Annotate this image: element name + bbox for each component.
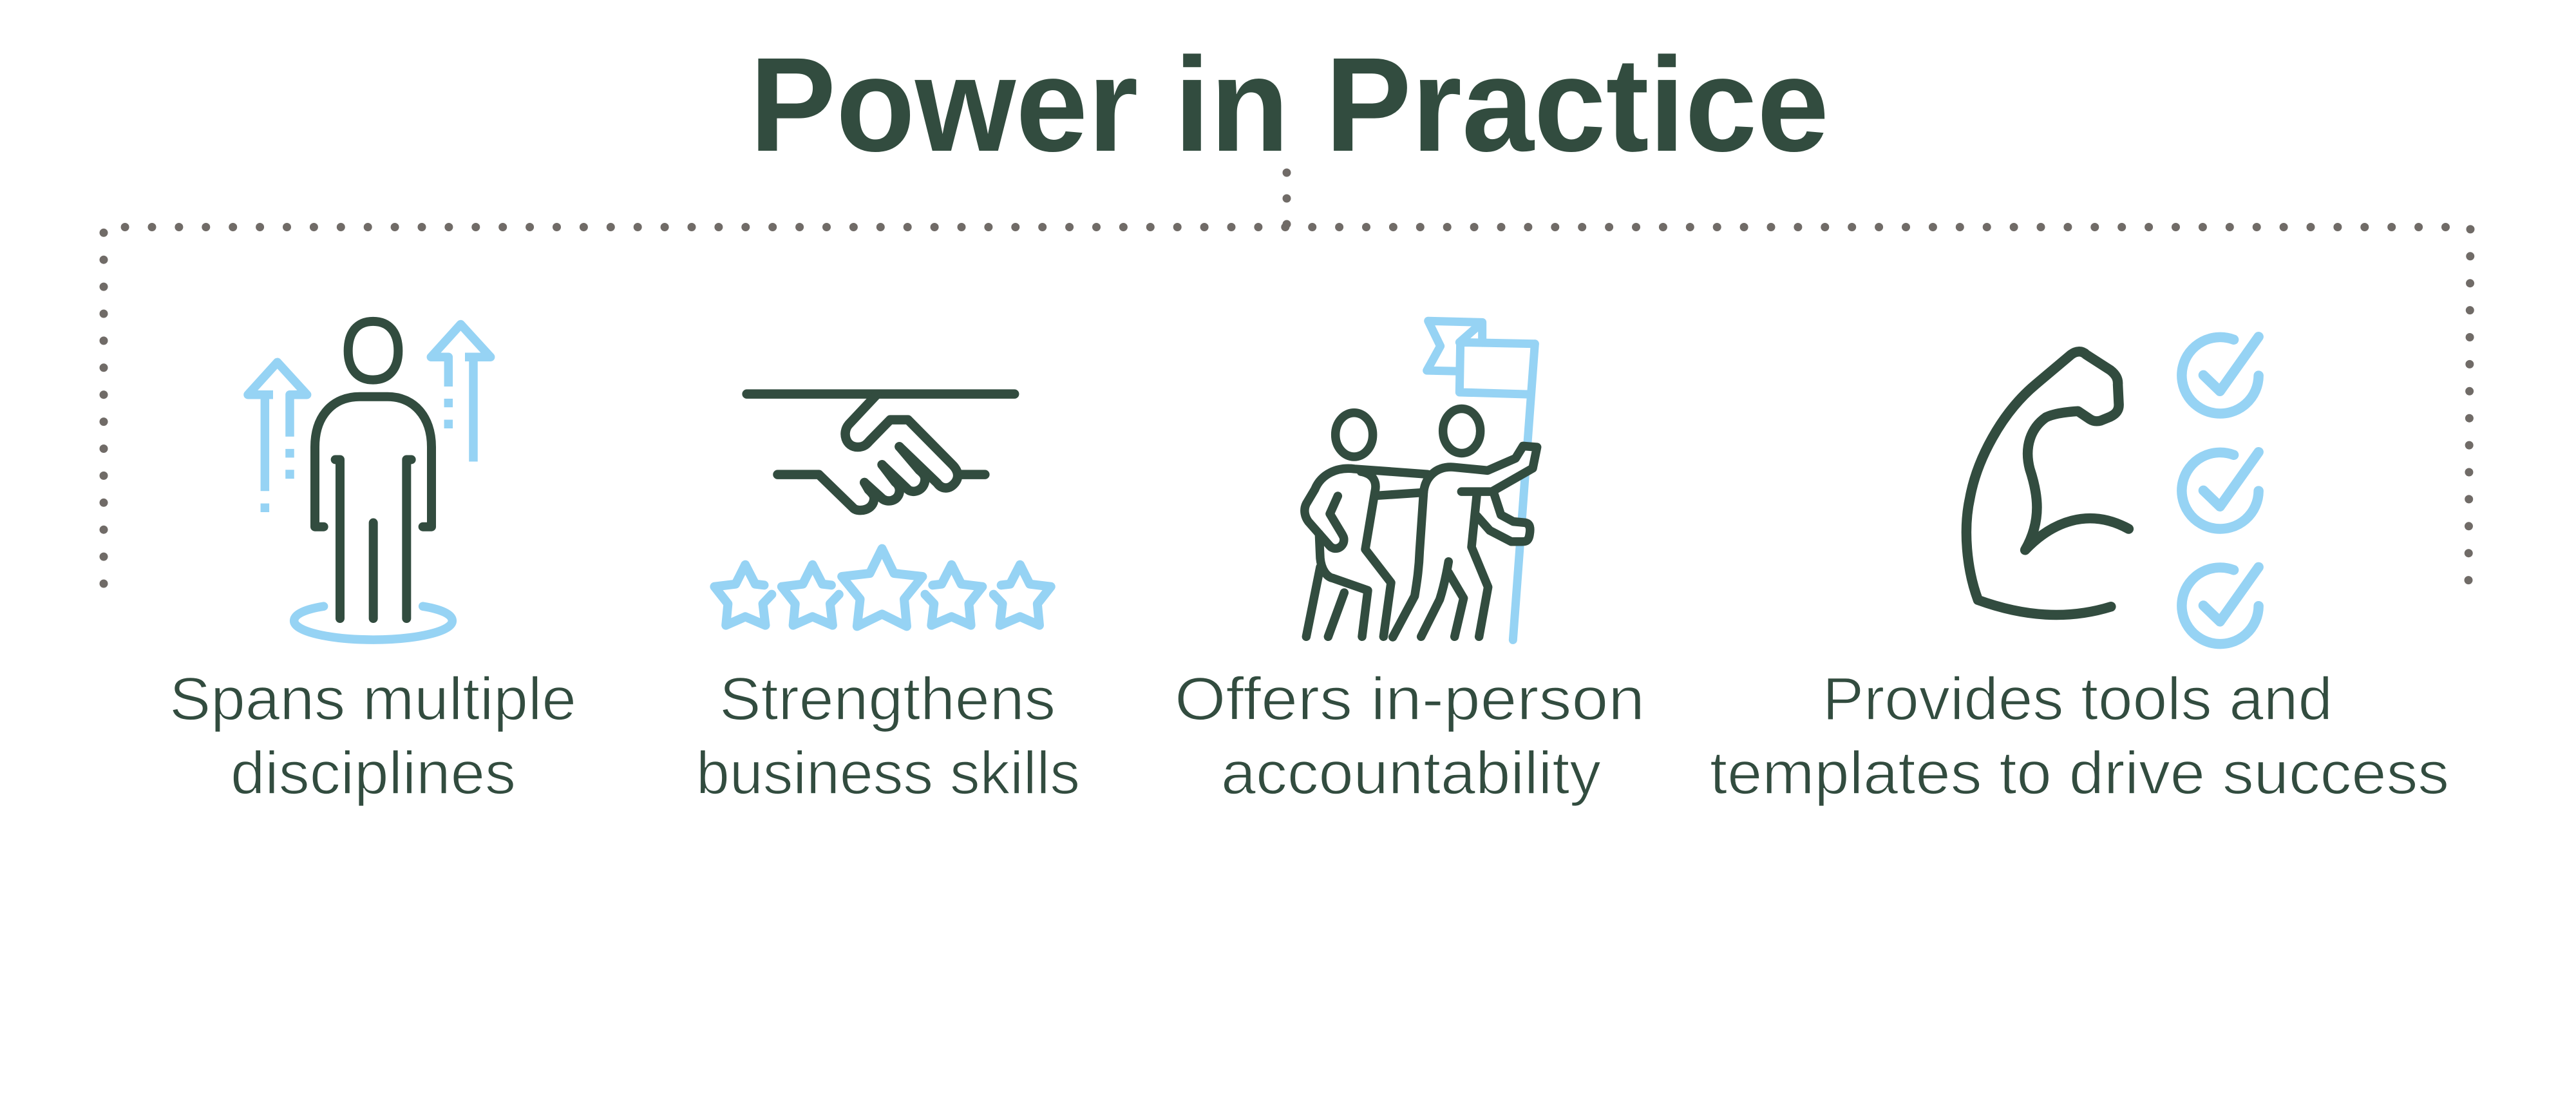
label: spans multiple disciplines: Spans multiple (169, 665, 576, 732)
white hand masks (1488, 446, 1537, 542)
label: strengthens business skills: business skills (696, 739, 1080, 807)
label: offers in-person accountability: accountability (1221, 739, 1601, 807)
panel: provides tools and templates (1710, 337, 2449, 807)
five stars (714, 549, 1051, 626)
label: offers in-person accountability (1175, 665, 1645, 807)
label: strengthens business skills (696, 665, 1080, 807)
panel: spans multiple disciplines (169, 321, 576, 807)
right arrow (431, 324, 491, 462)
icon: flexed arm with checklist (1966, 337, 2259, 644)
label: spans multiple disciplines (169, 665, 576, 807)
left person (1305, 413, 1428, 636)
flag and pole (1427, 321, 1535, 640)
label: provides tools and templates: Provides tools and (1823, 665, 2333, 732)
label: offers in-person accountability: Offers in-person (1175, 665, 1645, 732)
label: provides tools and templates: templates to drive success (1710, 739, 2449, 807)
icon: person with rising arrows (248, 321, 491, 640)
label: provides tools and templates (1710, 665, 2449, 807)
icon: handshake with stars (714, 394, 1051, 626)
panel: strengthens business skills (696, 394, 1080, 807)
icon: two people with flag (1305, 321, 1537, 640)
handshake (747, 394, 1014, 510)
person figure (315, 321, 431, 618)
left arrow (248, 362, 307, 512)
title: Power in Practice (750, 30, 1829, 180)
label: spans multiple disciplines: disciplines (231, 739, 516, 807)
dotted bracket connector (104, 173, 2470, 584)
check circles (2182, 337, 2259, 644)
flexed arm (1966, 352, 2128, 615)
label: strengthens business skills: Strengthens (719, 665, 1056, 732)
panel: offers in-person accountability (1175, 321, 1645, 807)
right person (1393, 408, 1537, 637)
ground ring (294, 606, 452, 640)
